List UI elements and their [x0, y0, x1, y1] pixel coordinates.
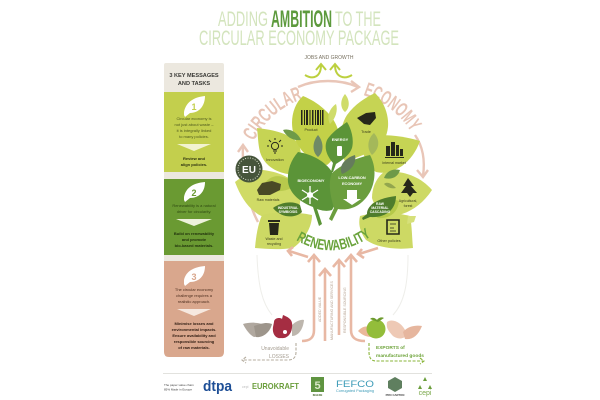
panel: message 2: driver for circularity.	[177, 209, 211, 214]
panel: message 2: bio-based materials.	[175, 243, 213, 248]
text: unavoidable losses: Unavoidable	[261, 346, 289, 352]
panel: message 1: it is integrally linked	[177, 128, 211, 133]
leaf: agricultural forest: Agricultural,	[399, 199, 417, 203]
panel: message 1: not just about waste –	[175, 122, 214, 127]
leaf: low-carbon economy: ECONOMY	[342, 181, 362, 186]
text: exports: EXPORTS of	[376, 345, 405, 351]
leaf: agricultural forest	[372, 172, 432, 215]
leaf: energy: ENERGY	[332, 137, 349, 142]
heading: CIRCULAR: CIRCULAR	[244, 87, 302, 139]
leaf: low-carbon economy	[329, 155, 374, 221]
title: ADDING	[218, 8, 268, 31]
panel: message 2	[164, 179, 224, 255]
logo: FEFCO	[336, 379, 374, 393]
panel: message 1: align policies.	[181, 162, 207, 167]
leaf: other policies	[359, 213, 416, 249]
title: TO THE	[335, 8, 381, 31]
text: value chain: 85% Made in Europe	[164, 388, 192, 392]
panel: message 1: Circular economy is	[176, 116, 212, 121]
circular arrow ring	[238, 81, 428, 222]
leaf: internal market: Internal market	[382, 161, 406, 165]
panel: message 2: and promote	[182, 237, 207, 242]
icon: leaf 1: 1	[191, 102, 197, 112]
EU badge	[236, 156, 262, 182]
logo: dtpa: dtpa	[203, 378, 233, 395]
leaf: waste and recycling: Waste and	[265, 237, 283, 241]
panel: message 3	[164, 261, 224, 357]
text: exports: manufactured goods	[376, 353, 424, 359]
leaf: industrial symbiosis	[273, 202, 302, 216]
leaf: trade: Trade	[361, 130, 371, 134]
logo: square: 5	[314, 380, 321, 392]
small decorative leaves	[283, 94, 400, 188]
leaf: agricultural forest: forest	[404, 204, 412, 208]
panel: key messages header: AND TASKS	[178, 81, 210, 87]
leaf: trade	[341, 93, 388, 162]
leaf: internal market	[362, 135, 420, 173]
icon: leaf 3: 3	[191, 272, 197, 282]
leaf: waste and recycling	[255, 212, 312, 249]
divider band	[164, 255, 224, 261]
arrow: losses	[242, 343, 296, 363]
leaf: other policies: Other policies	[377, 239, 401, 243]
leaf: product: Product	[304, 128, 318, 132]
leaf: raw material cascading: MATERIAL	[371, 206, 389, 210]
footer logos	[164, 377, 432, 397]
leaf: raw material cascading: CASCADING	[370, 210, 391, 214]
panel: message 3: realistic approach.	[178, 299, 210, 304]
flow labels: MANUFACTURING AND SERVICES	[330, 281, 334, 340]
leaf: product	[292, 96, 339, 165]
upward flow arrows	[288, 247, 378, 341]
logo: pro carton: PRO CARTON	[386, 393, 404, 397]
panel: message 3: Ensure availability and	[172, 333, 216, 338]
logo: EUROKRAFT: EUROKRAFT	[252, 381, 300, 391]
text: value chain	[164, 383, 194, 392]
leaf: raw materials	[235, 170, 300, 219]
panel: key messages header	[164, 63, 224, 93]
logo: FEFCO: FEFCO	[336, 379, 374, 389]
text: unavoidable losses: LOSSES	[269, 354, 290, 360]
flow labels: RESPONSIBLE SOURCING	[343, 287, 347, 333]
panel: message 2: Renewability is a natural	[172, 203, 216, 208]
panel: message 3: challenge requires a	[176, 293, 213, 298]
logo: EUROKRAFT: cepi	[242, 385, 249, 389]
leaf: raw materials: Raw materials	[257, 198, 280, 202]
arrow: exports	[369, 343, 424, 364]
leaf cluster	[235, 93, 432, 249]
panel: message 1	[164, 92, 224, 172]
flow labels: ADDED VALUE	[318, 296, 322, 322]
title: AMBITION	[271, 6, 332, 33]
footer rule	[163, 372, 432, 374]
heading: ECONOMY: ECONOMY	[364, 82, 422, 130]
logo: square: INGEDE	[313, 394, 323, 397]
panel: message 2: Build on renewability	[174, 231, 215, 236]
logo: cepi	[418, 377, 432, 397]
leaf: bioeconomy: BIOECONOMY	[297, 178, 325, 183]
icon: leaf 2: 2	[191, 188, 197, 198]
divider band	[164, 172, 224, 179]
leaf: innovation: Innovation	[266, 158, 284, 162]
leaf: waste and recycling: recycling	[267, 242, 281, 246]
text: unavoidable losses	[261, 346, 290, 360]
leaf: energy	[326, 122, 353, 172]
panel: message 3: of raw materials.	[178, 345, 210, 350]
EU badge: EU	[242, 165, 256, 176]
leaf: raw material cascading	[362, 196, 399, 220]
icon: growth arrows	[305, 64, 352, 77]
icon: losses group	[243, 315, 304, 338]
title	[199, 6, 399, 50]
title: CIRCULAR ECONOMY PACKAGE	[199, 27, 399, 50]
text: exports	[376, 345, 424, 359]
panel: message 3: responsible sourcing	[174, 339, 215, 344]
logo: FEFCO: Corrugated Packaging	[336, 389, 374, 393]
jobs and growth: JOBS AND GROWTH	[305, 55, 354, 61]
heading: RENEWABILITY: RENEWABILITY	[296, 228, 369, 250]
logo: cepi: cepi	[419, 390, 432, 397]
panel: key messages header: 3 KEY MESSAGES	[169, 73, 219, 79]
leaf: innovation	[257, 128, 301, 174]
loss and export curves	[257, 255, 408, 315]
panel: message 3: Minimise losses and	[175, 321, 214, 326]
jobs and growth	[305, 55, 354, 77]
panel: message 3: The circular economy	[175, 287, 213, 292]
text: value chain: The paper value chain	[164, 383, 194, 387]
leaf: industrial symbiosis: INDUSTRIAL	[278, 206, 298, 210]
panel: message 3: environmental impacts.	[172, 327, 216, 332]
panel: message 1: Review and	[183, 156, 206, 161]
leaf: low-carbon economy: LOW-CARBON	[338, 175, 366, 180]
logo: square	[311, 377, 324, 397]
flow labels	[318, 281, 347, 340]
leaf: industrial symbiosis: SYMBIOSIS	[279, 210, 298, 214]
panel: message 1: to many policies.	[179, 134, 209, 139]
logo: pro carton	[386, 377, 404, 397]
leaf: bioeconomy	[288, 152, 336, 226]
leaf: raw material cascading: RAW	[376, 202, 385, 206]
icon: exports group	[358, 317, 422, 339]
